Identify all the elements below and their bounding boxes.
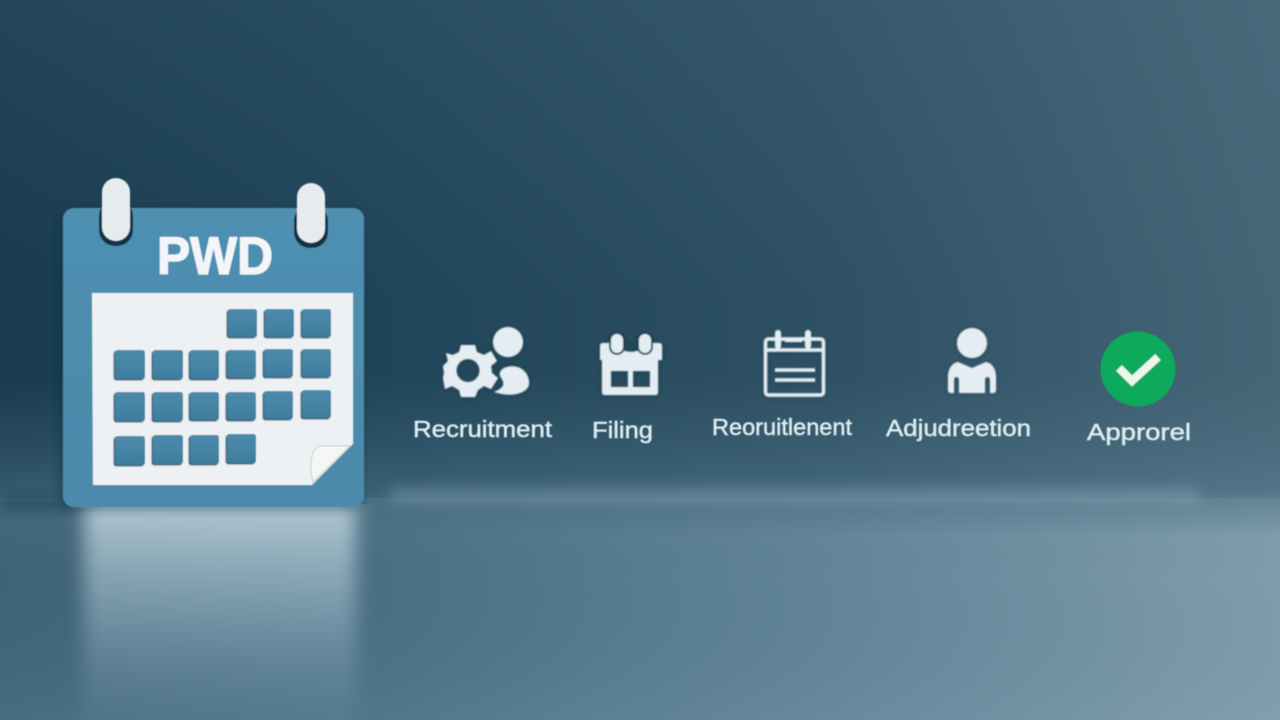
calendar body xyxy=(63,208,364,507)
icon: person xyxy=(948,328,996,393)
step 1: recruitment xyxy=(413,327,553,442)
label: Reoruitlenent xyxy=(712,414,853,440)
page curl xyxy=(311,446,350,482)
label: Approrel xyxy=(1087,419,1191,445)
date tiles xyxy=(115,309,331,465)
step 2: filing xyxy=(592,333,662,443)
icon: small calendar xyxy=(600,333,662,395)
label: Filing xyxy=(592,417,653,443)
label: Recruitment xyxy=(413,416,553,442)
step 5: approval xyxy=(1087,332,1191,445)
icon: document calendar xyxy=(766,333,824,395)
label: Adjudreetion xyxy=(886,415,1031,441)
PWD label: PWD xyxy=(157,227,273,286)
calendar icon xyxy=(63,178,364,507)
step 4: adjudication xyxy=(886,328,1031,441)
icon: green check badge xyxy=(1100,332,1176,406)
binder rings xyxy=(102,178,325,243)
calendar reflection on floor xyxy=(84,504,356,720)
icon: gear and person xyxy=(443,327,529,397)
step 3: outlined calendar xyxy=(712,333,853,440)
calendar sheet xyxy=(92,293,353,485)
ring holes xyxy=(99,200,328,248)
